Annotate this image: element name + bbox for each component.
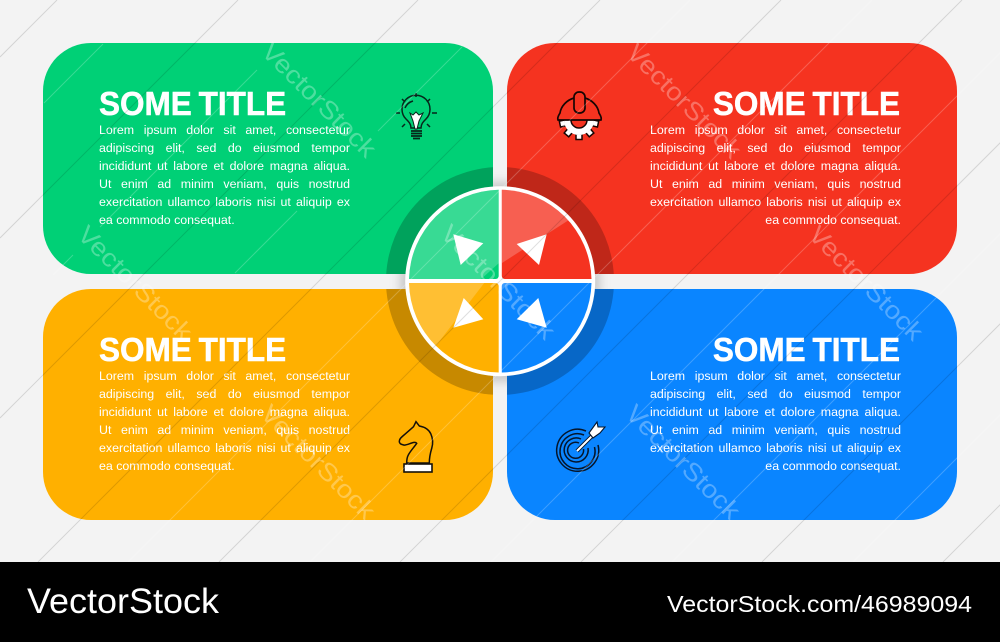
watermark text: VectorStock	[255, 399, 381, 526]
watermark text: VectorStock	[256, 37, 382, 164]
heading: orange card title: SOME TITLE	[99, 331, 286, 368]
icon: chess knight	[398, 420, 434, 473]
arrow: blue quadrant	[517, 298, 547, 328]
icon: target with dart	[556, 420, 606, 472]
watermark text: VectorStock	[72, 220, 198, 347]
text block: orange card body: ea commodo consequat.	[99, 459, 235, 473]
text block: green card body: Ut enim ad minim veniam, quis nostrud	[99, 177, 350, 191]
text block: orange card body: exercitation ullamco laboris nisi ut aliquip ex	[99, 441, 350, 455]
footer brand: VectorStock.com/46989094	[667, 591, 972, 617]
text block: orange card body: adipiscing elit, sed do eiusmod tempor	[99, 387, 350, 401]
watermark text: VectorStock	[803, 220, 929, 347]
text block: red card body: exercitation ullamco laboris nisi ut aliquip ex	[650, 195, 901, 209]
text block: orange card body: incididunt ut labore et dolore magna aliqua.	[99, 405, 350, 419]
text block: blue card body: Lorem ipsum dolor sit amet, consectetur	[650, 369, 901, 383]
footer bar	[0, 562, 1000, 642]
footer brand	[27, 582, 972, 621]
text block: orange card body	[99, 369, 350, 473]
text block: blue card body	[650, 369, 901, 473]
heading: red card title: SOME TITLE	[713, 85, 900, 122]
text block: red card body: incididunt ut labore et dolore magna aliqua.	[650, 159, 901, 173]
text block: red card body: Ut enim ad minim veniam, quis nostrud	[650, 177, 901, 191]
text block: blue card body: Ut enim ad minim veniam, quis nostrud	[650, 423, 901, 437]
quadrant: orange	[409, 283, 499, 372]
chart: central quadrant circle	[386, 167, 614, 395]
text block: red card body: ea commodo consequat.	[765, 213, 901, 227]
arrow: orange quadrant	[453, 298, 483, 328]
heading: blue card title: SOME TITLE	[713, 331, 900, 368]
panel: blue bottom-right card	[507, 289, 957, 520]
text block: green card body: Lorem ipsum dolor sit amet, consectetur	[99, 123, 350, 137]
text block: red card body	[650, 123, 901, 227]
heading: green card title: SOME TITLE	[99, 85, 286, 122]
white circle base	[405, 186, 595, 376]
text block: green card body: incididunt ut labore et dolore magna aliqua.	[99, 159, 350, 173]
watermark text: VectorStock	[621, 38, 747, 165]
arrow: red quadrant	[517, 234, 547, 265]
text block: red card body: adipiscing elit, sed do eiusmod tempor	[650, 141, 901, 155]
text block: orange card body: Ut enim ad minim veniam, quis nostrud	[99, 423, 350, 437]
text block: green card body: exercitation ullamco laboris nisi ut aliquip ex	[99, 195, 350, 209]
text block: blue card body: adipiscing elit, sed do eiusmod tempor	[650, 387, 901, 401]
text block: orange card body: Lorem ipsum dolor sit amet, consectetur	[99, 369, 350, 383]
soft shadow of circle	[400, 182, 600, 382]
text block: blue card body: exercitation ullamco laboris nisi ut aliquip ex	[650, 441, 901, 455]
icon: light bulb	[396, 93, 437, 140]
panel: orange bottom-left card	[43, 289, 493, 520]
text block: green card body	[99, 123, 350, 227]
text block: green card body: ea commodo consequat.	[99, 213, 235, 227]
icon: helmet and gear	[556, 91, 602, 140]
panel: green top-left card	[43, 43, 493, 274]
quadrant: blue	[502, 283, 592, 372]
arrow: green quadrant	[453, 234, 483, 265]
text block: red card body: Lorem ipsum dolor sit amet, consectetur	[650, 123, 901, 137]
panel: red top-right card	[507, 43, 957, 274]
quadrant: red	[502, 190, 592, 279]
dark ring behind circle	[386, 167, 614, 395]
watermark text: VectorStock	[620, 399, 746, 526]
footer brand: VectorStock	[27, 582, 220, 621]
quadrant: green	[409, 190, 499, 279]
text block: green card body: adipiscing elit, sed do eiusmod tempor	[99, 141, 350, 155]
watermark text: VectorStock	[435, 219, 561, 346]
text block: blue card body: ea commodo consequat.	[765, 459, 901, 473]
text block: blue card body: incididunt ut labore et dolore magna aliqua.	[650, 405, 901, 419]
